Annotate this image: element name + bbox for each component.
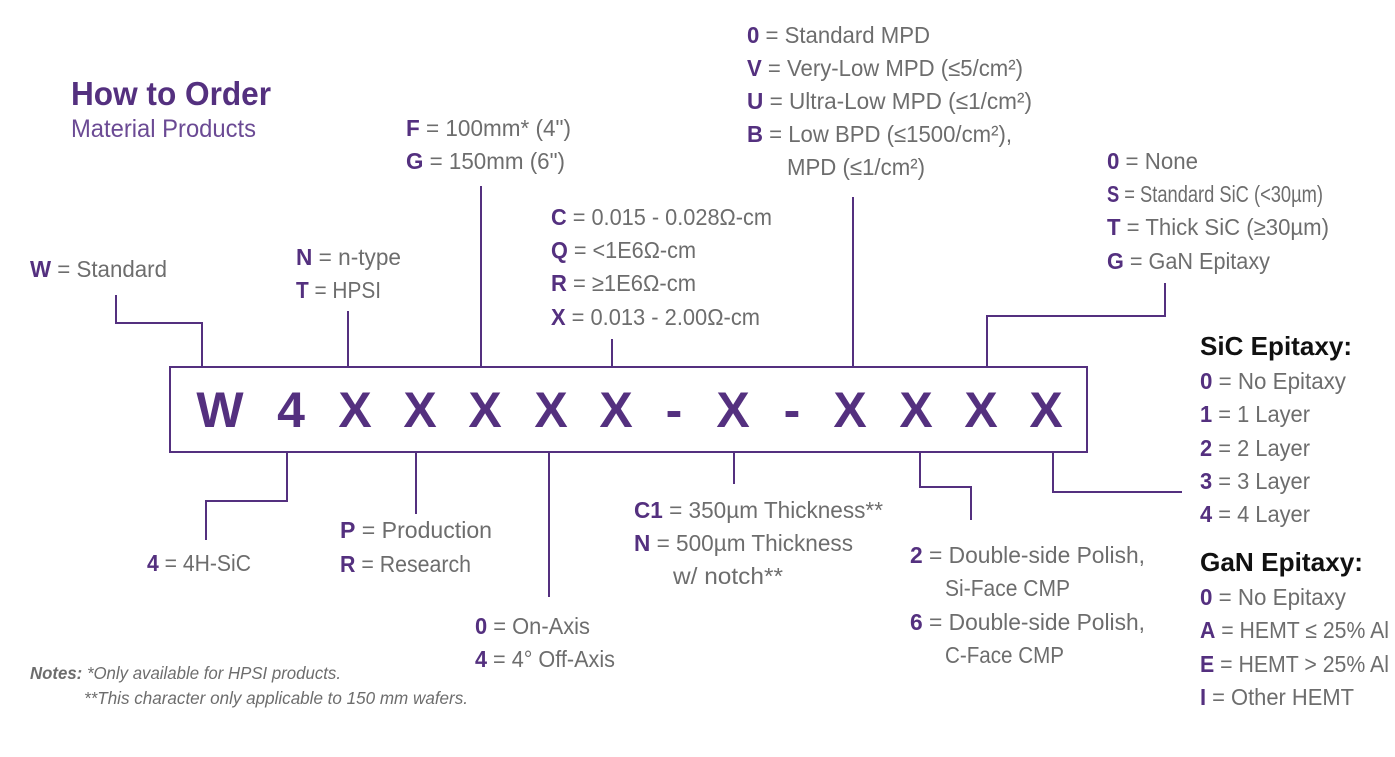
options: polish: 6 = Double-side Polish, xyxy=(910,609,1145,635)
options: orientation: 4 = 4° Off-Axis xyxy=(475,646,615,672)
SiC epitaxy legend: 0 = No Epitaxy xyxy=(1200,368,1346,394)
part number box: X xyxy=(964,382,998,438)
part number box: 4 xyxy=(277,382,305,438)
options: resistivity: X = 0.013 - 2.00Ω-cm xyxy=(551,304,760,330)
options: epitaxy type: T = Thick SiC (≥30µm) xyxy=(1107,214,1329,240)
options: thickness: w/ notch** xyxy=(672,563,783,589)
SiC epitaxy legend: 2 = 2 Layer xyxy=(1200,435,1310,461)
options: micropipe density xyxy=(747,22,1032,180)
part number box: X xyxy=(468,382,502,438)
options: resistivity: R = ≥1E6Ω-cm xyxy=(551,270,696,296)
options: type: N = n-type xyxy=(296,244,401,270)
options: grade xyxy=(340,517,492,577)
part number box: X xyxy=(599,382,633,438)
options: grade: P = Production xyxy=(340,517,492,543)
options: resistivity xyxy=(551,204,772,330)
options: polish xyxy=(910,542,1145,668)
options: thickness xyxy=(634,497,883,589)
part number box xyxy=(170,367,1087,452)
part number box: - xyxy=(784,382,800,438)
options: resistivity: Q = <1E6Ω-cm xyxy=(551,237,696,263)
part number box: W xyxy=(196,382,244,438)
options: epitaxy type xyxy=(1107,148,1329,274)
part number box: X xyxy=(403,382,437,438)
options: orientation xyxy=(475,613,615,672)
SiC epitaxy legend: 1 = 1 Layer xyxy=(1200,401,1310,427)
notes xyxy=(30,663,468,708)
options: type xyxy=(296,244,401,303)
part number box: X xyxy=(899,382,933,438)
GaN epitaxy legend: 0 = No Epitaxy xyxy=(1200,584,1346,610)
options: micropipe density: U = Ultra-Low MPD (≤1/cm²) xyxy=(747,88,1032,114)
GaN epitaxy legend: GaN Epitaxy: xyxy=(1200,547,1363,577)
options: orientation: 0 = On-Axis xyxy=(475,613,590,639)
options: thickness: C1 = 350µm Thickness** xyxy=(634,497,883,523)
options: epitaxy type: S = Standard SiC (<30µm) xyxy=(1107,181,1323,207)
part number box: X xyxy=(716,382,750,438)
options: epitaxy type: G = GaN Epitaxy xyxy=(1107,248,1270,274)
options: polish: Si-Face CMP xyxy=(945,575,1070,601)
SiC epitaxy legend: SiC Epitaxy: xyxy=(1200,331,1352,361)
options: diameter xyxy=(406,115,571,174)
title: How to Order xyxy=(71,75,271,112)
SiC epitaxy legend: 3 = 3 Layer xyxy=(1200,468,1310,494)
options: diameter: G = 150mm (6") xyxy=(406,148,565,174)
SiC epitaxy legend xyxy=(1200,331,1352,527)
GaN epitaxy legend xyxy=(1200,547,1389,710)
options: grade: R = Research xyxy=(340,551,471,577)
part number box: - xyxy=(666,382,682,438)
option: polytype: 4 = 4H-SiC xyxy=(147,550,251,576)
title xyxy=(71,75,271,143)
options: micropipe density: MPD (≤1/cm²) xyxy=(787,154,925,180)
option: W standard: W = Standard xyxy=(30,256,167,282)
options: polish: 2 = Double-side Polish, xyxy=(910,542,1145,568)
options: resistivity: C = 0.015 - 0.028Ω-cm xyxy=(551,204,772,230)
part number box: X xyxy=(338,382,372,438)
options: polish: C-Face CMP xyxy=(945,642,1064,668)
options: epitaxy type: 0 = None xyxy=(1107,148,1198,174)
connector lines xyxy=(116,186,1182,597)
options: micropipe density: B = Low BPD (≤1500/cm²), xyxy=(747,121,1012,147)
part number box: X xyxy=(833,382,867,438)
options: micropipe density: 0 = Standard MPD xyxy=(747,22,930,48)
notes: Notes: *Only available for HPSI products. xyxy=(30,663,341,683)
title: Material Products xyxy=(71,115,256,143)
options: micropipe density: V = Very-Low MPD (≤5/cm²) xyxy=(747,55,1023,81)
options: thickness: N = 500µm Thickness xyxy=(634,530,853,556)
SiC epitaxy legend: 4 = 4 Layer xyxy=(1200,501,1310,527)
part number box: X xyxy=(534,382,568,438)
notes: **This character only applicable to 150 mm wafers. xyxy=(84,688,468,708)
part number box: X xyxy=(1029,382,1063,438)
GaN epitaxy legend: I = Other HEMT xyxy=(1200,684,1354,710)
options: type: T = HPSI xyxy=(296,277,381,303)
options: diameter: F = 100mm* (4") xyxy=(406,115,571,141)
